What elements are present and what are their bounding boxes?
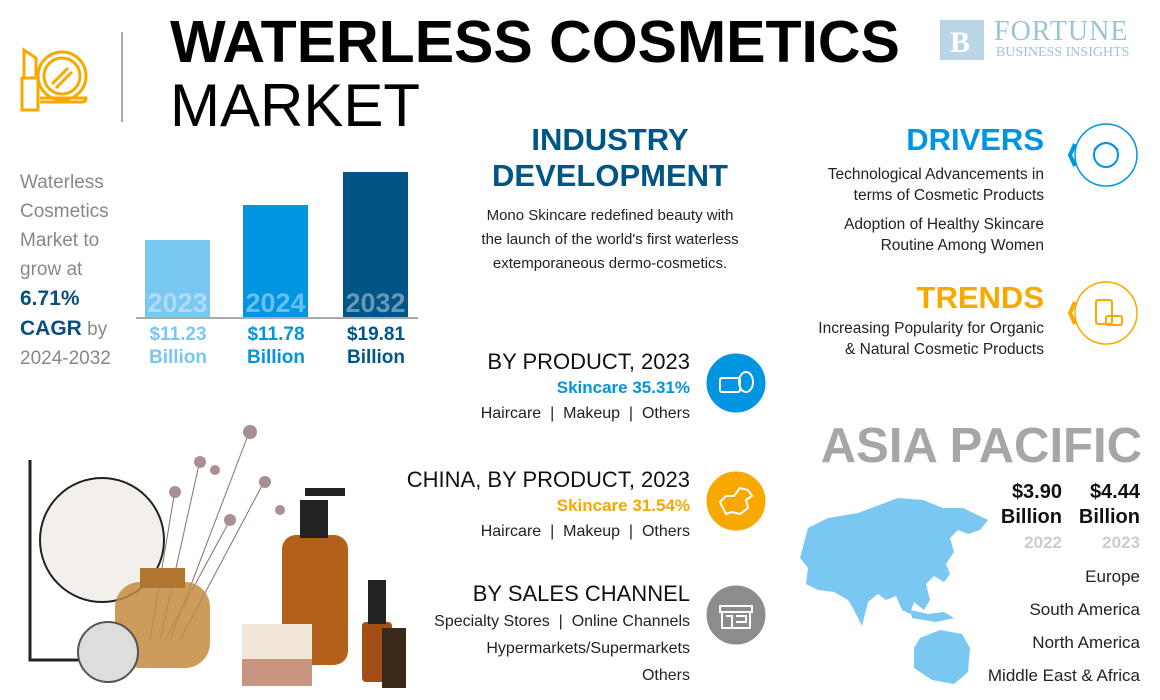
industry development: extemporaneous dermo-cosmetics.: [493, 255, 727, 272]
logo: Fortune Business Insights: FORTUNE: [994, 16, 1128, 47]
asia pacific values: [1001, 481, 1062, 552]
icon: organic cream: [1068, 281, 1138, 345]
other regions: Middle East & Africa: [988, 666, 1140, 685]
drivers: Technological Advancements in: [828, 166, 1044, 183]
bar chart: 2023: [147, 288, 208, 318]
other regions: North America: [1032, 633, 1140, 652]
bar chart: Billion: [149, 347, 207, 368]
by product: BY PRODUCT, 2023: [487, 349, 690, 374]
asia pacific heading: ASIA PACIFIC: [821, 419, 1142, 473]
text: Billion: [1079, 506, 1140, 528]
text block: CAGR: [20, 172, 111, 369]
icon: face: [1068, 123, 1138, 187]
china by product: Haircare | Makeup | Others: [481, 523, 690, 540]
logo: Fortune Business Insights: B: [950, 26, 970, 59]
trends: & Natural Cosmetic Products: [845, 341, 1044, 358]
bar chart: $19.81: [347, 324, 405, 345]
by sales channel: Hypermarkets/Supermarkets: [486, 640, 690, 657]
bar chart: [136, 172, 418, 368]
china by product: Skincare 31.54%: [557, 496, 690, 515]
bar chart: Billion: [347, 347, 405, 368]
by sales channel: BY SALES CHANNEL: [473, 581, 690, 606]
title: WATERLESS COSMETICS: [170, 9, 900, 75]
icon: china map: [706, 472, 766, 530]
bar chart: Billion: [247, 347, 305, 368]
icon: cream jar: [706, 354, 766, 412]
industry development: Mono Skincare redefined beauty with: [487, 207, 733, 224]
photo: cosmetics still life: [28, 425, 406, 688]
bar chart: $11.78: [247, 324, 305, 345]
by sales channel: Specialty Stores | Online Channels: [434, 613, 690, 630]
other regions: Europe: [1085, 567, 1140, 586]
bar chart: 2024: [245, 288, 306, 318]
trends: TRENDS: [917, 280, 1044, 315]
other regions: South America: [1029, 600, 1140, 619]
title: MARKET: [170, 72, 420, 139]
text block: CAGR: 6.71%: [20, 287, 80, 310]
by sales channel: [434, 581, 690, 684]
by product: Haircare | Makeup | Others: [481, 405, 690, 422]
text: $4.44: [1090, 481, 1140, 503]
icon: lipstick and compact: [20, 47, 88, 112]
china by product: [407, 467, 690, 540]
text block: CAGR: Waterless Cosmetics Market to grow at: [20, 172, 109, 280]
drivers: Adoption of Healthy Skincare: [844, 216, 1044, 233]
drivers: DRIVERS: [906, 122, 1044, 157]
by product: [481, 349, 690, 422]
divider: [121, 32, 123, 122]
trends: [818, 280, 1044, 358]
industry development: DEVELOPMENT: [492, 158, 728, 193]
asia pacific values: Billion: [1001, 506, 1062, 528]
text block: CAGR: CAGR by 2024-2032: [20, 317, 111, 369]
logo: Fortune Business Insights: [940, 16, 1129, 60]
icon: store: [706, 586, 766, 644]
asia pacific values: $3.90: [1012, 481, 1062, 503]
bar chart: 2032: [345, 288, 406, 318]
bar chart: $11.23: [149, 324, 207, 345]
industry development: INDUSTRY: [531, 122, 689, 157]
trends: Increasing Popularity for Organic: [818, 320, 1044, 337]
china by product: CHINA, BY PRODUCT, 2023: [407, 467, 690, 492]
text: 2023: [1102, 533, 1140, 552]
industry development: [481, 122, 739, 272]
other regions: [988, 567, 1140, 685]
by sales channel: Others: [642, 667, 690, 684]
asia pacific values: 2022: [1024, 533, 1062, 552]
title: [170, 9, 900, 139]
logo: Fortune Business Insights: BUSINESS INSIGHTS: [996, 45, 1129, 60]
industry development: the launch of the world's first waterless: [481, 231, 739, 248]
by product: Skincare 35.31%: [557, 378, 690, 397]
drivers: terms of Cosmetic Products: [854, 187, 1044, 204]
map: asia pacific: [800, 498, 988, 684]
drivers: Routine Among Women: [881, 237, 1044, 254]
drivers: [828, 122, 1044, 254]
